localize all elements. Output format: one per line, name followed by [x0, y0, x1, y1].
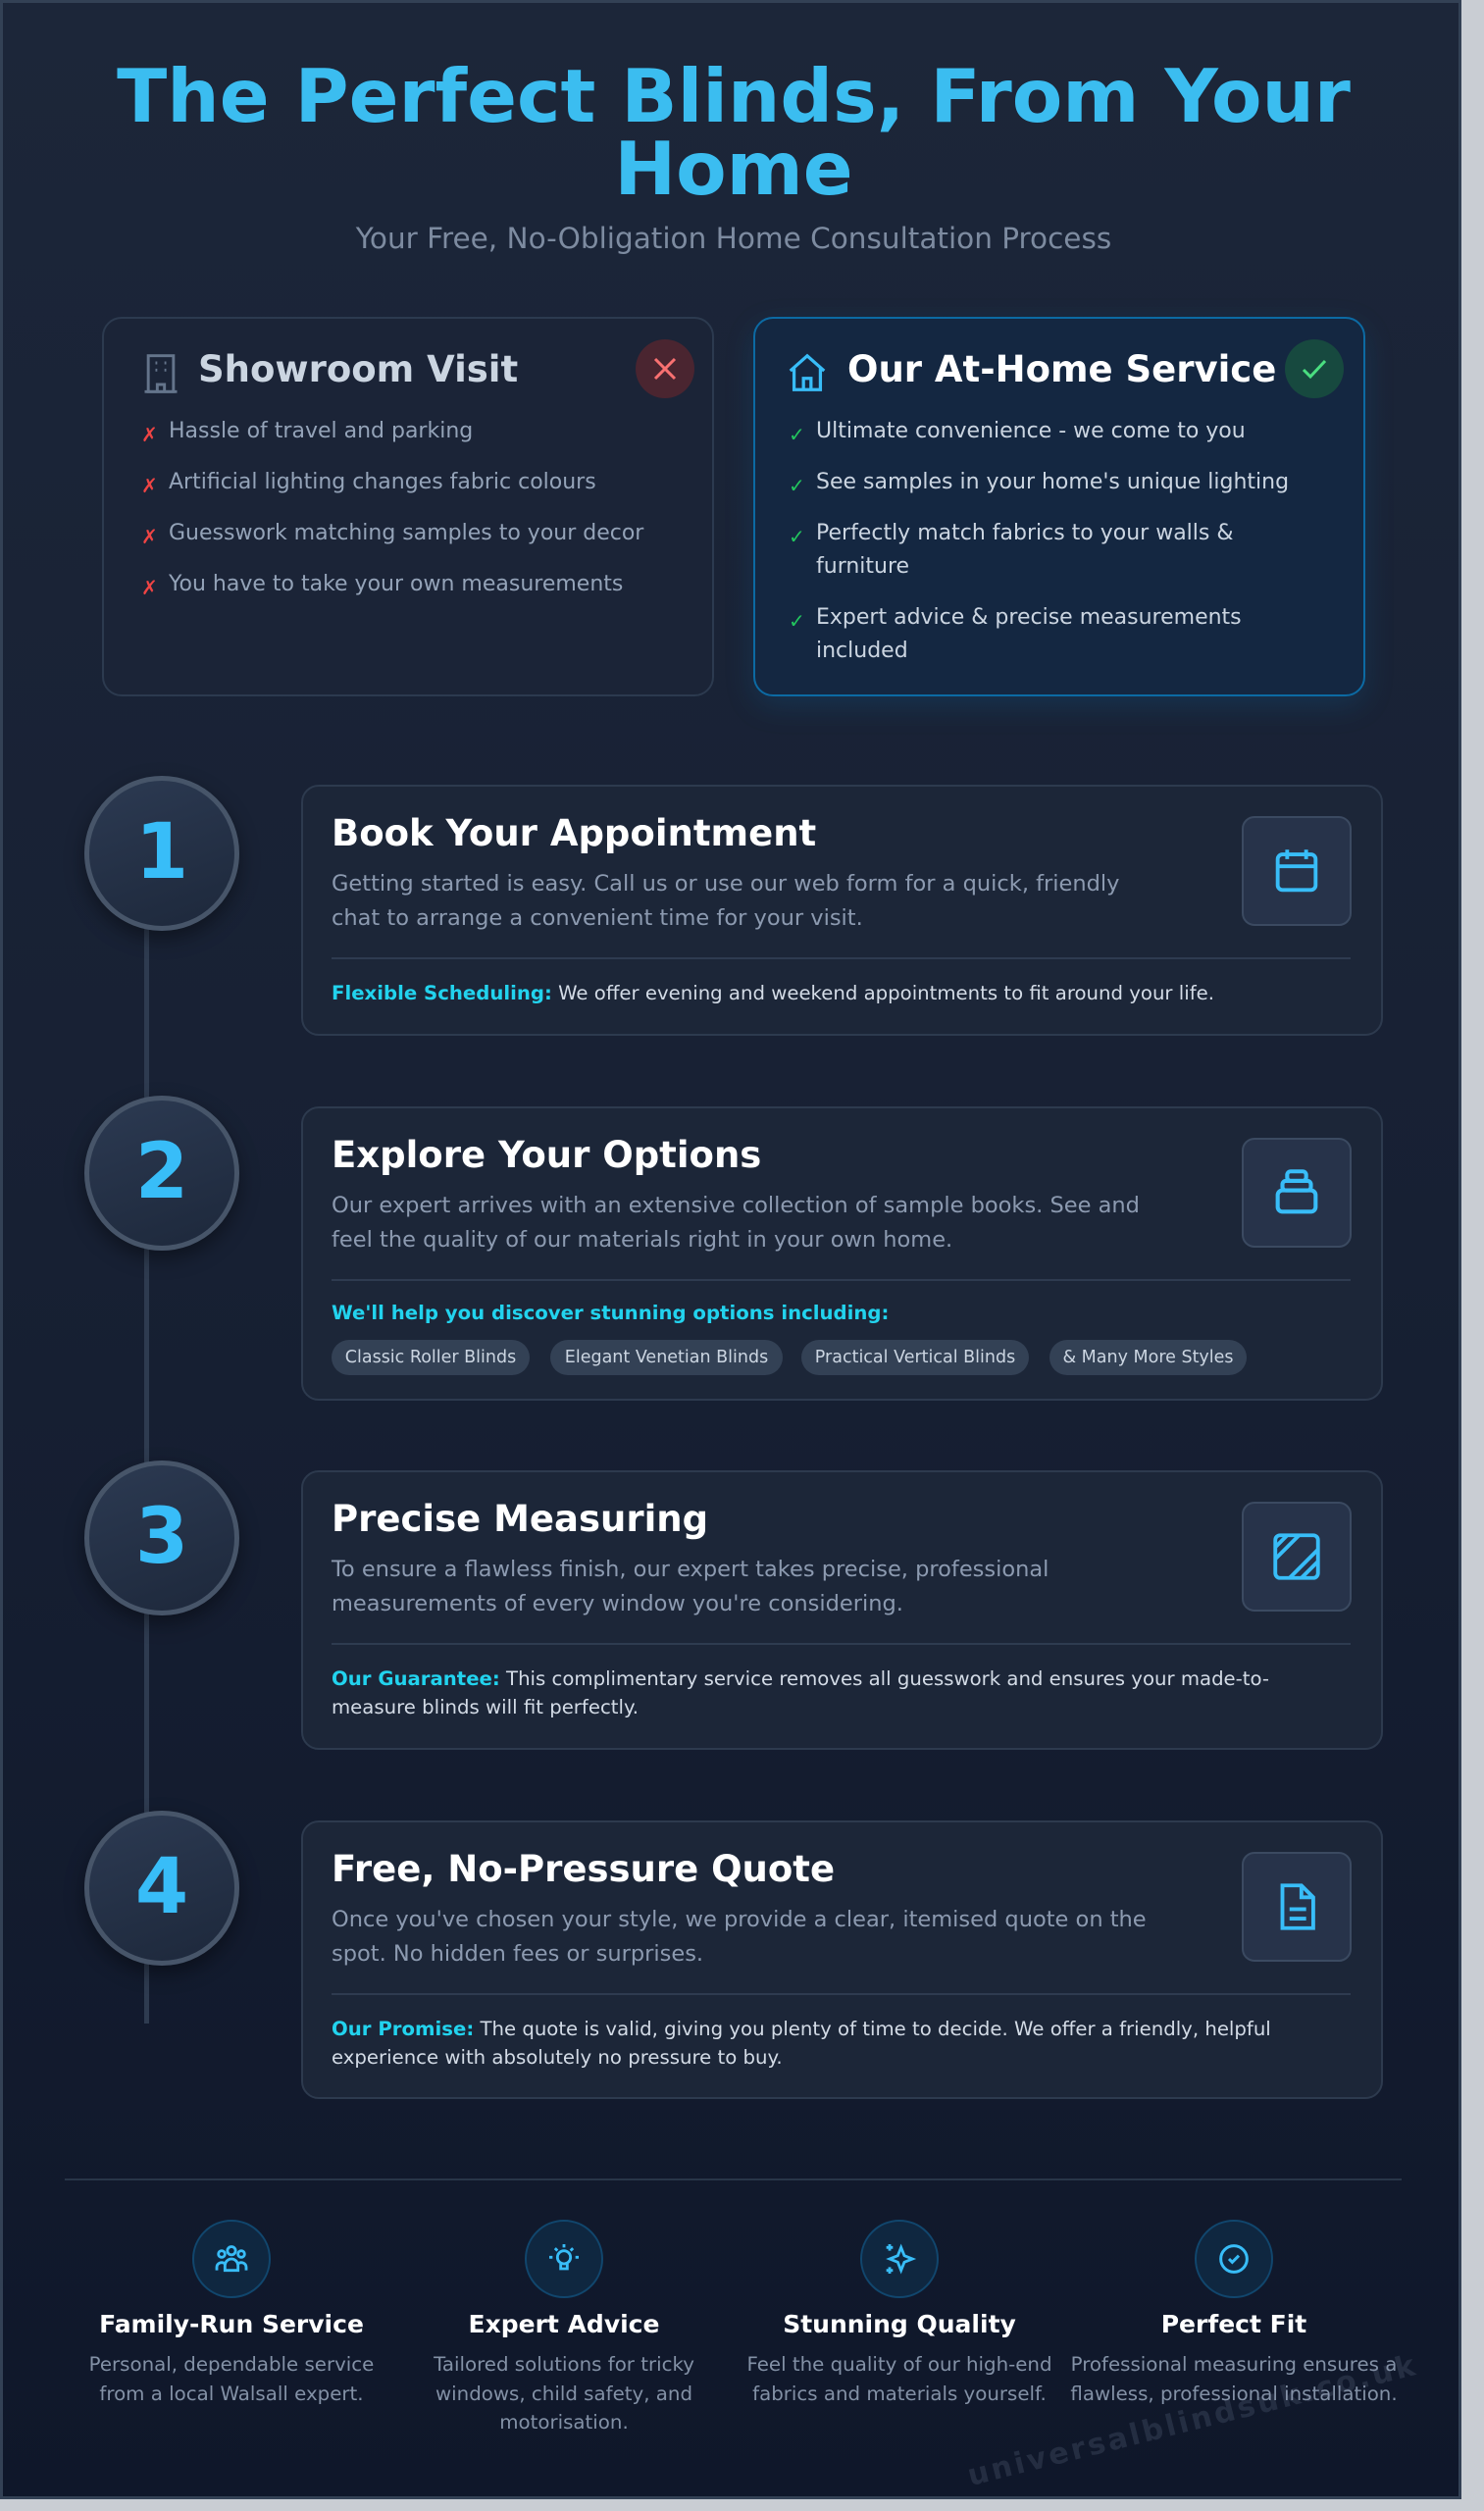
feature: family-run: Personal, dependable service from a local Walsall expert. [89, 2353, 374, 2405]
bottom divider [65, 2178, 1402, 2180]
feature: stunning quality: Stunning Quality [783, 2310, 1016, 2338]
step 1 card [301, 785, 1383, 1036]
description: Our expert arrives with an extensive collection of sample books. See and feel the quality of our materials right in your own home. [332, 1193, 1140, 1253]
title: Home [614, 126, 853, 212]
watermark: universalblindsuk.co.uk [964, 2348, 1421, 2493]
list: at-home benefits: Perfectly match fabrics to your walls & furniture [816, 521, 1234, 579]
title: The Perfect Blinds, From Your [117, 53, 1351, 139]
step 2 number: 2 [135, 1128, 188, 1216]
list: at-home benefits: Expert advice & precise measurements included [816, 605, 1242, 663]
description: Getting started is easy. Call us or use our web form for a quick, friendly chat to arrange a convenient time for your visit. [332, 871, 1120, 931]
step 4 number: 4 [135, 1843, 188, 1931]
tag [332, 1340, 530, 1375]
feature: perfect fit: Perfect Fit [1161, 2310, 1306, 2338]
footer note: Flexible Scheduling: We offer evening and weekend appointments to fit around your life. [332, 982, 1214, 1004]
step 1 number: 1 [135, 808, 188, 897]
feature: stunning quality [746, 2220, 1052, 2405]
feature: perfect fit [1070, 2220, 1398, 2405]
list: showroom drawbacks: Guesswork matching samples to your decor [169, 521, 643, 545]
list: showroom drawbacks: ✗ [141, 474, 158, 497]
description: Once you've chosen your style, we provide a clear, itemised quote on the spot. No hidden fees or surprises. [332, 1907, 1147, 1967]
step 3 card [301, 1470, 1383, 1750]
heading: Explore Your Options [332, 1134, 761, 1176]
step 3 number [84, 1460, 239, 1615]
subtitle: Your Free, No-Obligation Home Consultation Process [356, 222, 1111, 255]
heading: showroom: Showroom Visit [198, 348, 518, 390]
heading: Precise Measuring [332, 1498, 708, 1540]
list: at-home benefits [789, 419, 1289, 663]
step 2 card [301, 1106, 1383, 1401]
list: showroom drawbacks: ✗ [141, 423, 158, 446]
icon: sample books [1242, 1138, 1352, 1248]
panel: at-home service [753, 317, 1365, 696]
tag [1049, 1340, 1247, 1375]
feature: stunning quality: Feel the quality of our high-end fabrics and materials yourself. [746, 2353, 1052, 2405]
options label: We'll help you discover stunning options including: [332, 1302, 889, 1324]
tag: Practical Vertical Blinds [815, 1348, 1015, 1367]
heading: Free, No-Pressure Quote [332, 1848, 835, 1890]
icon: house [789, 353, 826, 391]
icon: building [145, 354, 177, 393]
icon: document [1242, 1852, 1352, 1962]
tag: Classic Roller Blinds [345, 1348, 516, 1367]
footer note: Our Guarantee: This complimentary service removes all guesswork and ensures your made-to-measure blinds will fit perfectly. [332, 1667, 1269, 1718]
heading: at-home: Our At-Home Service [847, 348, 1276, 390]
panel: showroom visit [102, 317, 714, 696]
list: showroom drawbacks: You have to take your own measurements [169, 572, 623, 596]
feature: perfect fit: Professional measuring ensures a flawless, professional installation. [1070, 2353, 1398, 2405]
step 1 number [84, 776, 239, 931]
list: at-home benefits: ✓ [789, 609, 805, 633]
step 4 card [301, 1820, 1383, 2099]
tag: Elegant Venetian Blinds [565, 1348, 768, 1367]
tag [801, 1340, 1029, 1375]
list: at-home benefits: Ultimate convenience - we come to you [816, 419, 1246, 443]
badge: x [636, 339, 694, 398]
icon: check circle [1195, 2220, 1273, 2298]
timeline line [144, 852, 149, 2024]
list: showroom drawbacks: ✗ [141, 525, 158, 548]
icon: sparkles [860, 2220, 939, 2298]
list: showroom drawbacks: Artificial lighting changes fabric colours [169, 470, 596, 494]
step 3 number: 3 [135, 1493, 188, 1581]
footer note: Our Promise: The quote is valid, giving you plenty of time to decide. We offer a friendly, helpful experience with absolutely no pressure to buy. [332, 2018, 1271, 2069]
step 4 number [84, 1811, 239, 1966]
list: at-home benefits: ✓ [789, 525, 805, 548]
badge: check [1285, 339, 1344, 398]
list: at-home benefits: See samples in your home's unique lighting [816, 470, 1289, 494]
list: showroom drawbacks: ✗ [141, 576, 158, 599]
description: To ensure a flawless finish, our expert takes precise, professional measurements of every window you're considering. [332, 1557, 1049, 1616]
feature: expert advice: Tailored solutions for tricky windows, child safety, and motorisation. [434, 2353, 694, 2434]
heading: Book Your Appointment [332, 812, 816, 854]
title [117, 53, 1351, 212]
list: at-home benefits: ✓ [789, 423, 805, 446]
icon: measure [1242, 1502, 1352, 1612]
feature: expert advice: Expert Advice [469, 2310, 659, 2338]
feature: family-run: Family-Run Service [99, 2310, 364, 2338]
icon: family [192, 2220, 271, 2298]
tag: & Many More Styles [1062, 1348, 1234, 1367]
icon: bulb [525, 2220, 603, 2298]
tag [550, 1340, 783, 1375]
list: showroom drawbacks: Hassle of travel and parking [169, 419, 473, 443]
feature: expert advice [434, 2220, 694, 2434]
icon: calendar [1242, 816, 1352, 926]
step 2 number [84, 1096, 239, 1251]
list: at-home benefits: ✓ [789, 474, 805, 497]
list: showroom drawbacks [141, 419, 643, 599]
feature: family-run [89, 2220, 374, 2405]
